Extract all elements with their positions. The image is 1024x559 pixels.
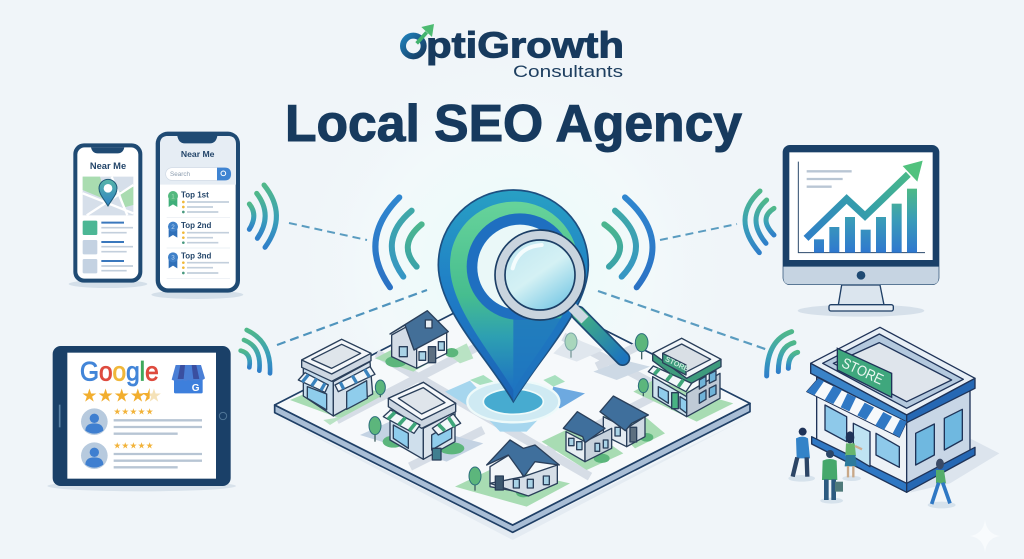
review 2 [81, 441, 202, 469]
review 1 [81, 408, 202, 435]
map shadow [277, 417, 750, 540]
monitor stand [829, 285, 893, 311]
store building [811, 327, 975, 492]
ranking 2: 2 [171, 224, 175, 231]
store awning [807, 378, 907, 437]
phone: top rankings: Search [170, 171, 191, 178]
tree 1 [369, 417, 381, 442]
store: right green: STORE [664, 354, 690, 374]
person: woman walking [928, 459, 956, 508]
phone: map view: Near Me [90, 161, 126, 171]
Google wordmark: Google [80, 357, 159, 387]
panel: storefront with customers [767, 327, 999, 508]
star rating: ★★★★★ [81, 385, 162, 406]
map target rings under pin [445, 375, 585, 432]
panel: phones [69, 132, 276, 299]
store: centre [383, 382, 464, 460]
dashed connector: tablet to pin [277, 290, 427, 345]
monitor body [783, 145, 939, 285]
title: Local SEO Agency [285, 95, 742, 153]
growth arrow [806, 161, 923, 238]
house: right rear [600, 396, 653, 447]
icon: location pin [438, 190, 588, 402]
signal waves: right of pin [604, 197, 652, 287]
person: man in blue [788, 428, 815, 482]
map city blocks [290, 337, 733, 507]
signal waves: store [767, 332, 798, 376]
ranking 3: Top 3nd [181, 251, 212, 260]
tree 3 [469, 467, 481, 491]
ranking 1 [168, 191, 229, 213]
signal waves: phones [249, 185, 276, 247]
dashed connector: phones to pin [289, 223, 367, 240]
logo wordmark: ptiGrowth [426, 24, 624, 65]
phone: top rankings [151, 132, 243, 299]
panel: Google reviews tablet [47, 330, 270, 491]
dashed connector: monitor to pin [660, 224, 737, 240]
icon: magnifying glass [495, 230, 623, 358]
store sign: STORE [839, 355, 886, 389]
logo icon: ring with growth arrow [403, 24, 434, 56]
store: right green [648, 338, 721, 417]
review 1: ★★★★★ [113, 408, 154, 418]
tree 4 [565, 333, 577, 358]
ranking 2: Top 2nd [181, 221, 212, 230]
logo: OptiGrowth Consultants [403, 24, 624, 65]
tree 6 [638, 379, 648, 396]
ranking 3 [168, 251, 229, 274]
map roads [337, 333, 690, 483]
logo subtitle: Consultants [513, 62, 623, 81]
house: top left [385, 311, 458, 368]
signal waves: monitor [745, 191, 774, 253]
ranking 2 [168, 221, 229, 244]
icon: business profile store: G [192, 383, 200, 394]
panel: central local map [275, 190, 750, 540]
watermark sparkle [970, 520, 1000, 552]
phone: map view [69, 143, 147, 288]
review 2: ★★★★★ [113, 441, 154, 451]
signal waves: left of pin [375, 197, 422, 287]
icon: business profile store [172, 365, 205, 394]
house: bottom [487, 440, 559, 497]
store shadow [910, 438, 999, 493]
signal waves: tablet [241, 330, 270, 373]
ranking 3: 3 [171, 255, 175, 262]
phone: top rankings: Near Me [181, 149, 215, 159]
store: left [298, 339, 375, 416]
ranking 1: Top 1st [181, 191, 209, 200]
panel: analytics monitor [745, 145, 939, 317]
text placeholder lines [807, 171, 852, 187]
ranking 1: 1 [171, 193, 175, 200]
tree 2 [375, 380, 385, 397]
dashed connector: store to pin [598, 291, 768, 350]
person: woman at door [842, 431, 862, 481]
tree 5 [635, 334, 648, 359]
chart axes [798, 162, 925, 253]
house: right front [563, 412, 612, 463]
person: man with briefcase [820, 450, 843, 504]
map base [275, 283, 750, 532]
bar chart [814, 189, 917, 253]
